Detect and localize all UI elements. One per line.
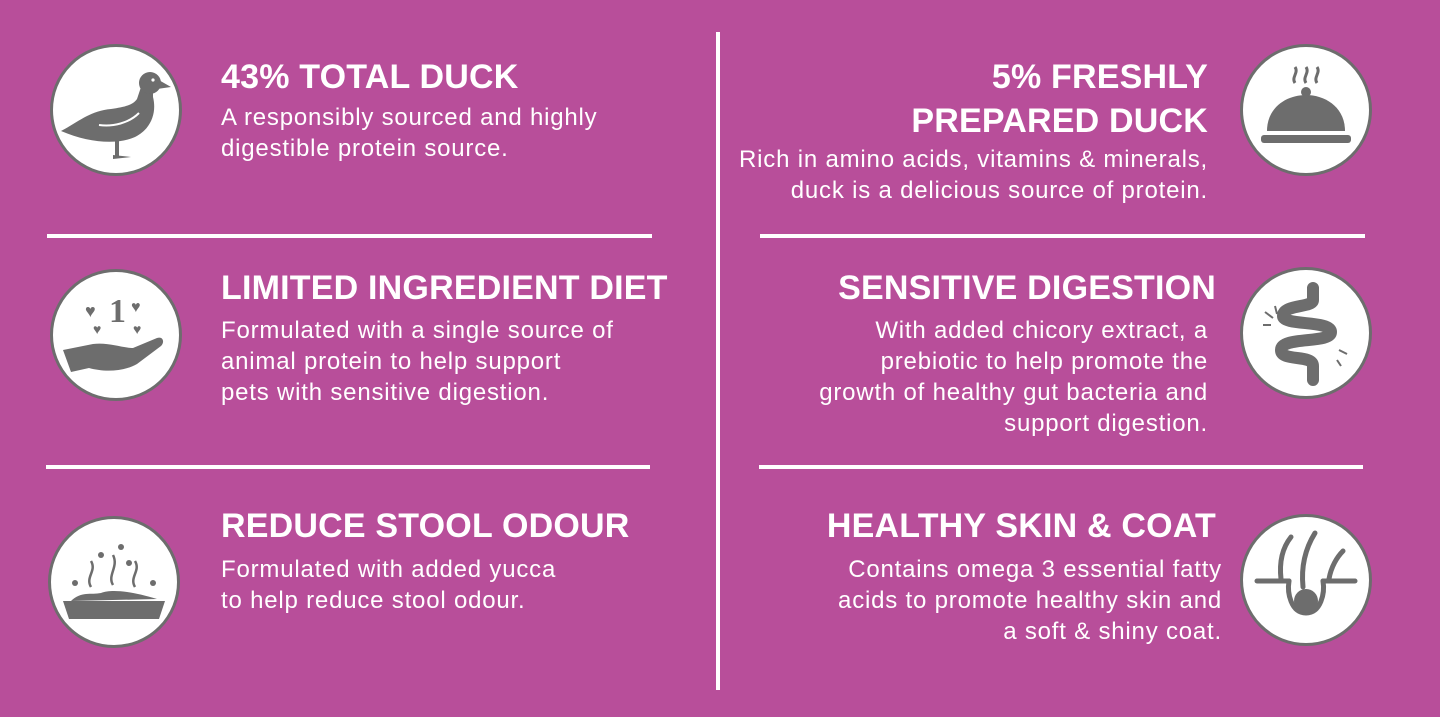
text: prepared duck description: Rich in amino acids, vitamins & minerals, bbox=[739, 146, 1208, 173]
text: sensitive digestion description: support digestion. bbox=[1004, 410, 1208, 437]
heading: sensitive digestion: SENSITIVE DIGESTION bbox=[838, 269, 1216, 307]
icon: hair follicle bbox=[1240, 514, 1372, 646]
text: skin and coat description bbox=[838, 556, 1222, 645]
text: limited ingredient description: Formulated with a single source of bbox=[221, 317, 614, 344]
heading: 5% freshly prepared duck: 5% FRESHLY bbox=[992, 58, 1208, 96]
text: sensitive digestion description: prebiotic to help promote the bbox=[881, 348, 1208, 375]
icon: litter tray bbox=[48, 516, 180, 648]
heading: 5% freshly prepared duck bbox=[911, 58, 1208, 140]
text: duck description: A responsibly sourced and highly bbox=[221, 104, 597, 131]
text: skin and coat description: a soft & shiny coat. bbox=[1003, 618, 1222, 645]
icon: hand with hearts: ♥ bbox=[133, 321, 141, 337]
text: stool odour description: to help reduce stool odour. bbox=[221, 587, 525, 614]
heading: 5% freshly prepared duck: PREPARED DUCK bbox=[911, 102, 1208, 140]
icon: hand with hearts: ♥ bbox=[131, 299, 140, 316]
text: skin and coat description: Contains omega 3 essential fatty bbox=[848, 556, 1222, 583]
vertical divider bbox=[716, 32, 720, 690]
icon: intestine bbox=[1240, 267, 1372, 399]
text: limited ingredient description bbox=[221, 317, 614, 406]
text: sensitive digestion description: With added chicory extract, a bbox=[875, 317, 1208, 344]
text: limited ingredient description: pets with sensitive digestion. bbox=[221, 379, 549, 406]
icon: hand with hearts: 1 bbox=[109, 293, 126, 330]
icon: hand with hearts: ♥ bbox=[93, 321, 101, 337]
text: stool odour description bbox=[221, 556, 556, 614]
heading: limited ingredient diet: LIMITED INGREDIENT DIET bbox=[221, 269, 668, 307]
text: prepared duck description bbox=[739, 146, 1208, 204]
heading: healthy skin and coat: HEALTHY SKIN & COAT bbox=[827, 507, 1216, 545]
text: skin and coat description: acids to promote healthy skin and bbox=[838, 587, 1222, 614]
text: sensitive digestion description: growth of healthy gut bacteria and bbox=[819, 379, 1208, 406]
heading: reduce stool odour: REDUCE STOOL ODOUR bbox=[221, 507, 630, 545]
heading: 43% total duck: 43% TOTAL DUCK bbox=[221, 58, 519, 96]
text: stool odour description: Formulated with added yucca bbox=[221, 556, 556, 583]
text: sensitive digestion description bbox=[819, 317, 1208, 437]
icon: hand with hearts: ♥ bbox=[85, 301, 96, 321]
text: prepared duck description: duck is a delicious source of protein. bbox=[791, 177, 1208, 204]
text: duck description bbox=[221, 104, 597, 162]
icon: duck bbox=[50, 44, 182, 176]
icon: hand with hearts bbox=[50, 269, 182, 401]
icon: cloche bbox=[1240, 44, 1372, 176]
text: limited ingredient description: animal protein to help support bbox=[221, 348, 561, 375]
text: duck description: digestible protein source. bbox=[221, 135, 509, 162]
